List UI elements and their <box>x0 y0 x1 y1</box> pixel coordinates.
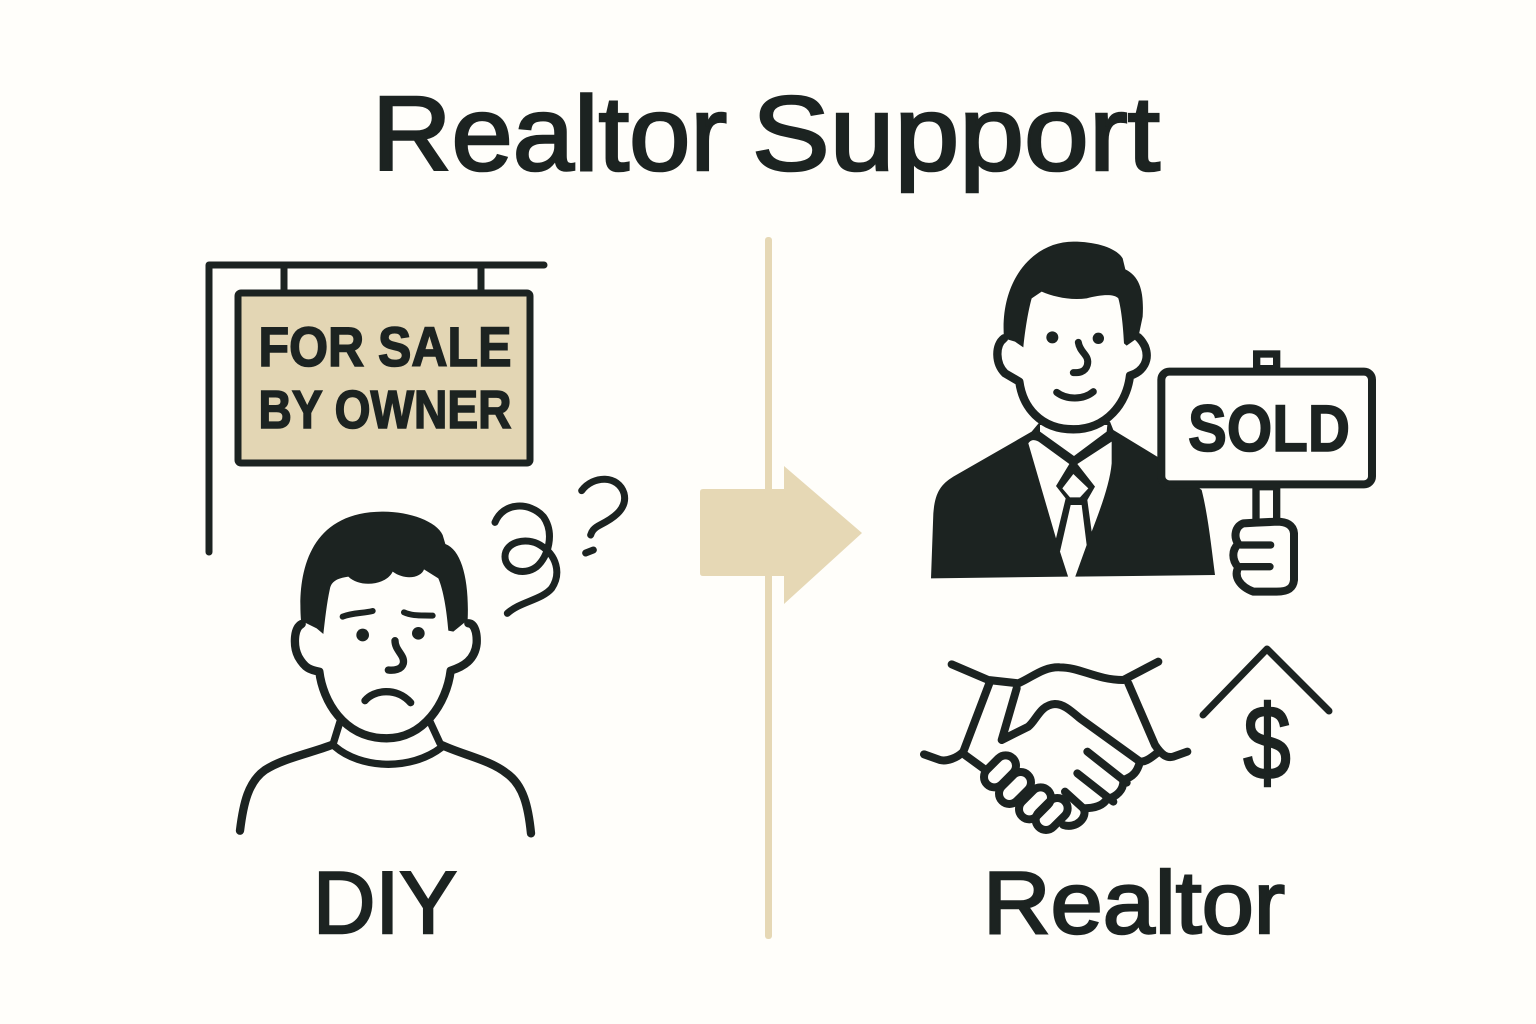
label: Realtor: Realtor <box>983 853 1285 952</box>
icon: realtor with sold sign <box>931 242 1372 592</box>
suit <box>931 422 1215 578</box>
hand holding sign <box>1233 522 1294 592</box>
smile <box>1057 392 1093 398</box>
nose <box>388 641 404 670</box>
question mark <box>582 479 625 553</box>
shoulders <box>240 745 531 833</box>
shirt and tie <box>1028 425 1112 577</box>
face outline <box>997 337 1147 429</box>
arrow <box>700 466 862 604</box>
sign text: for sale: FOR SALE <box>258 315 512 378</box>
dollar sign: $ <box>1243 686 1291 802</box>
icon: house roof and dollar <box>1203 649 1329 802</box>
for sale by owner sign <box>209 265 544 552</box>
label: DIY: DIY <box>313 853 457 952</box>
title: Realtor <box>372 75 727 193</box>
icon: handshake <box>924 662 1187 834</box>
eyes <box>356 627 425 641</box>
icon: confused DIY person <box>240 479 625 833</box>
sold sign text: SOLD <box>1188 391 1350 465</box>
sign top post <box>1257 354 1277 369</box>
finger lines <box>1241 545 1271 567</box>
title: Support <box>752 75 1160 193</box>
eyes <box>1046 331 1104 344</box>
hair <box>1004 242 1143 347</box>
title <box>372 75 1160 193</box>
sign text: by owner: BY OWNER <box>258 380 512 440</box>
frown <box>365 692 411 703</box>
nose <box>1073 342 1088 373</box>
eyebrows <box>343 611 433 617</box>
confusion squiggle <box>495 506 557 613</box>
neck and collar <box>333 722 442 764</box>
hair <box>300 512 468 634</box>
sign bottom post <box>1256 487 1277 523</box>
sign board <box>238 293 530 463</box>
sold sign board <box>1161 372 1372 484</box>
center divider line <box>765 237 772 939</box>
face outline <box>295 623 477 738</box>
